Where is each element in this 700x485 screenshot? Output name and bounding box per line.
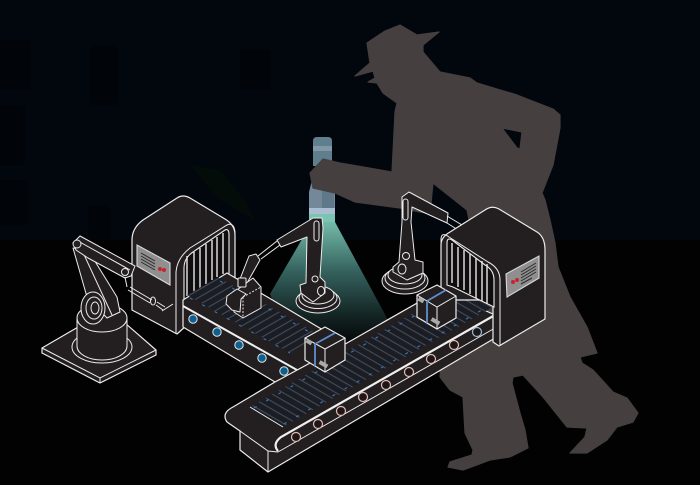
belt: upper section: [187, 277, 320, 353]
man silhouette: [310, 25, 638, 470]
rollers: long section: [292, 328, 482, 442]
conveyor: upper left section: [183, 273, 345, 382]
robot arm 1: left on square base: [42, 236, 156, 383]
arch opening: [447, 239, 494, 307]
robot arm 2: centre: [240, 218, 340, 313]
arch opening: [184, 230, 229, 300]
side lever: [128, 287, 173, 311]
arch bars: [452, 243, 487, 304]
label plate: [506, 256, 539, 297]
conveyor: long section: [225, 290, 495, 472]
left machine housing: [128, 196, 235, 334]
belt: long section: [250, 290, 493, 427]
arch bars: [187, 233, 223, 296]
box with gripper: on upper conveyor: [226, 278, 261, 318]
box: on far end of long conveyor: [417, 285, 456, 329]
rollers: upper section: [189, 315, 288, 375]
box: on junction: [305, 327, 345, 372]
right machine housing: [441, 207, 545, 346]
base plate: [42, 323, 156, 383]
flashlight: [309, 137, 335, 222]
robot arm 3: right: [382, 192, 462, 294]
label plate: [137, 245, 170, 285]
light beam from flashlight: [270, 222, 388, 345]
